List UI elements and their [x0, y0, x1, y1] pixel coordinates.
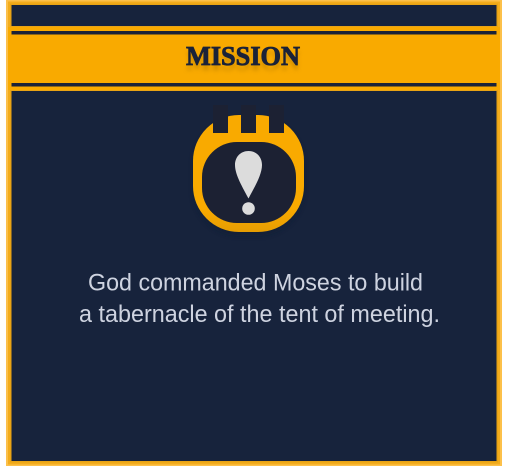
icon: calendar alert	[193, 105, 304, 236]
heading: MISSION: MISSION	[186, 41, 300, 71]
text block: mission statement: a tabernacle of the tent of meeting.	[79, 301, 440, 328]
text block: mission statement	[79, 270, 440, 328]
panel: heading band	[8, 27, 500, 90]
icon: exclamation mark	[235, 151, 262, 215]
heading: MISSION: MISSION	[186, 46, 300, 76]
panel: top navy strip	[12, 5, 496, 26]
text block: mission statement: God commanded Moses to build	[88, 270, 423, 296]
panel: main navy body	[12, 91, 496, 461]
